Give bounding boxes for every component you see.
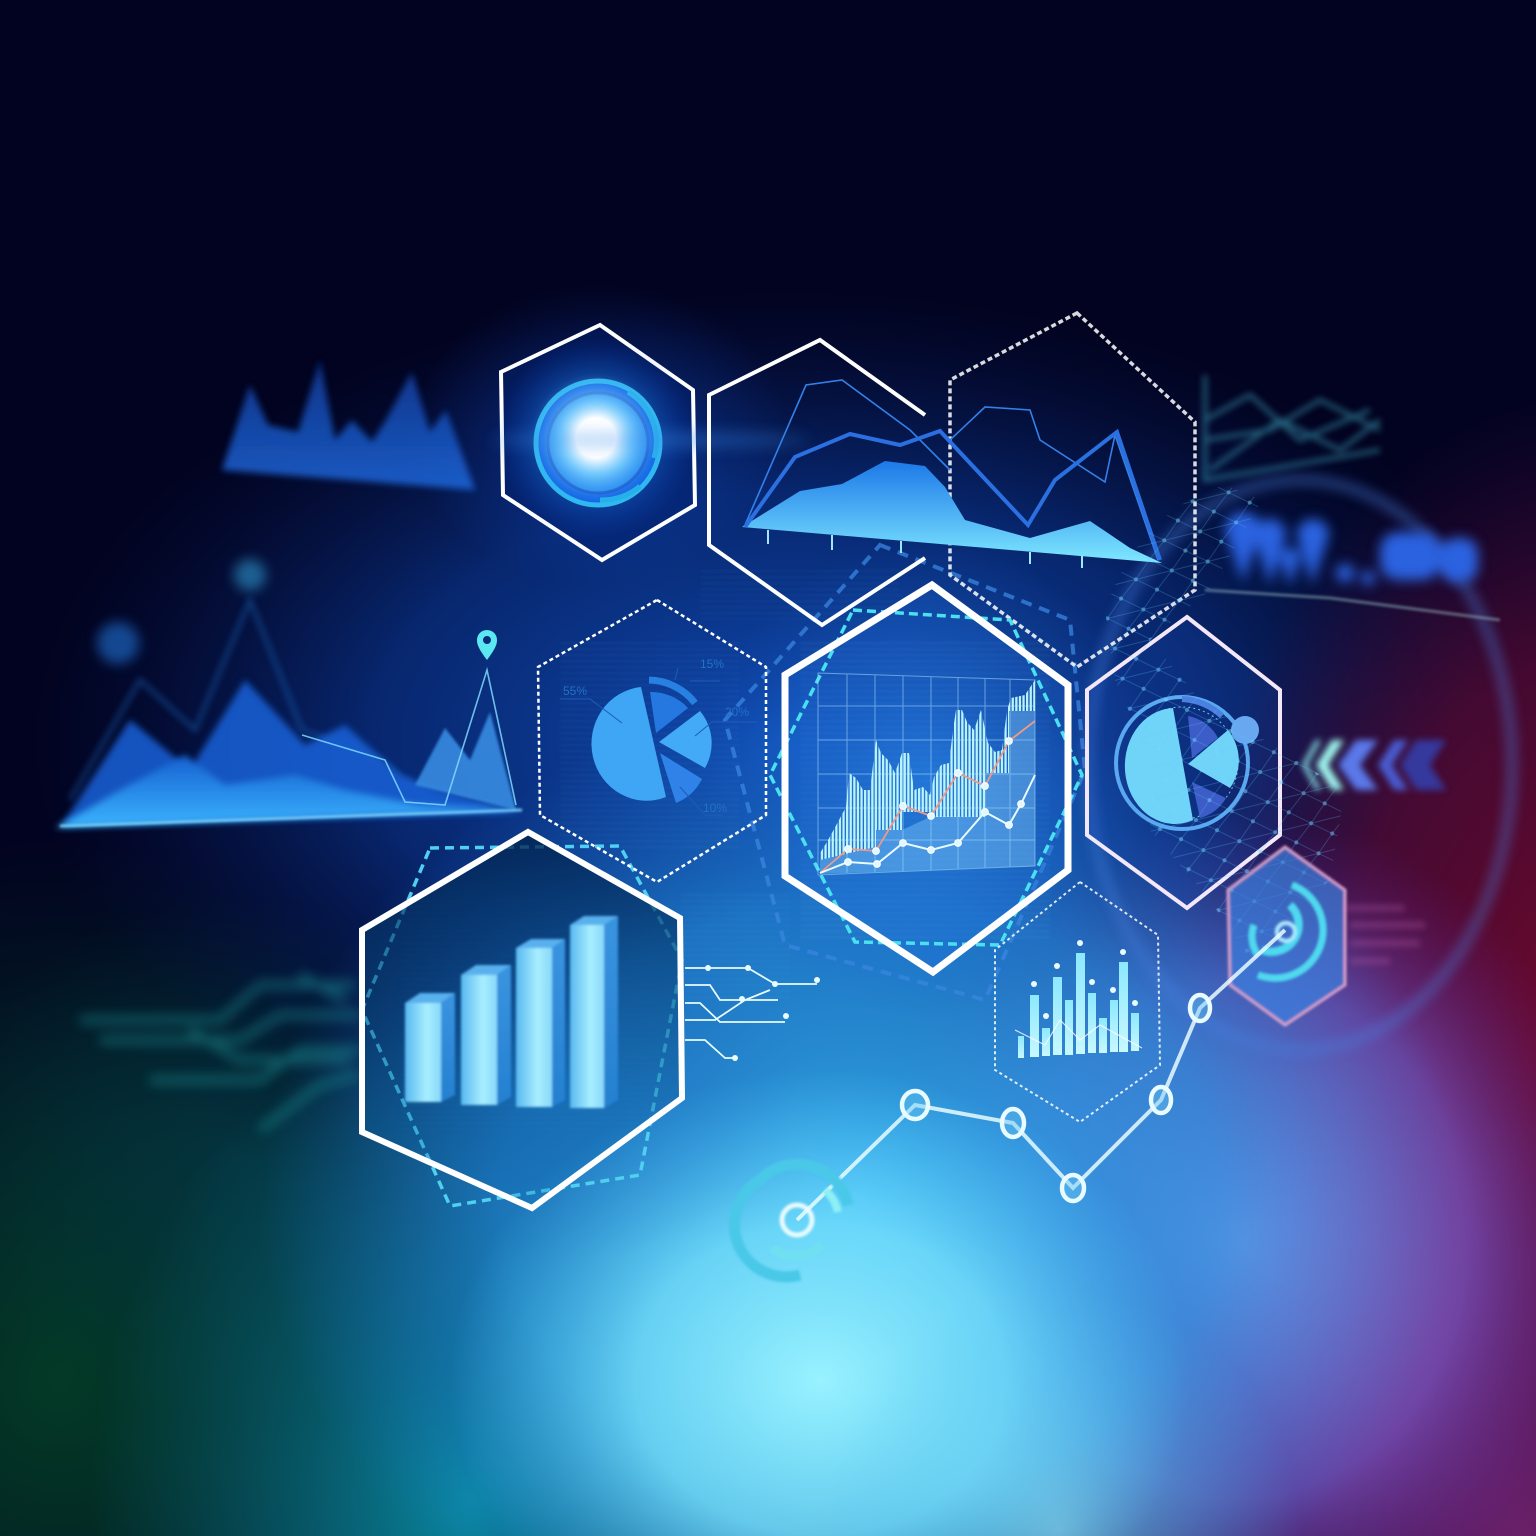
dashed outer hexagon around center bbox=[725, 545, 1085, 1000]
circuit traces, right sharp bbox=[685, 965, 820, 1061]
baseline ticks bbox=[768, 530, 1082, 568]
scan line panels bbox=[400, 570, 1050, 1130]
pie slice large bbox=[591, 687, 666, 801]
radial arcs bbox=[1258, 885, 1323, 978]
pie slice top bbox=[650, 692, 688, 733]
thin line with peak bbox=[302, 670, 516, 805]
pie labels bbox=[563, 657, 749, 815]
hexagon: area and line chart bbox=[709, 313, 1195, 667]
stripe bars bbox=[820, 680, 1035, 860]
bars bbox=[1018, 953, 1139, 1058]
ring segments bbox=[600, 392, 656, 500]
front peak areas bbox=[415, 712, 516, 810]
lower arc bbox=[772, 1245, 822, 1256]
dotted hexagon bbox=[950, 313, 1195, 667]
radial target icon at line start bbox=[734, 1164, 848, 1277]
top right blurred line chart bbox=[1205, 375, 1380, 480]
gauge large slice bbox=[1125, 708, 1193, 824]
overlay line bbox=[1015, 1020, 1142, 1048]
baseline bbox=[60, 810, 522, 826]
cyan dashed hexagon bbox=[770, 610, 1082, 945]
horizontal flare streak bbox=[490, 434, 810, 446]
left area chart bbox=[55, 559, 522, 828]
sharp map pin bbox=[477, 630, 497, 660]
thin upper lines bbox=[745, 380, 1158, 560]
area fill bbox=[742, 461, 1162, 563]
gauge disc bbox=[536, 381, 660, 505]
hub ring bbox=[1277, 923, 1295, 941]
blurred stripes on right bbox=[1345, 905, 1425, 964]
blurred horizontal axis on right bbox=[1205, 590, 1500, 620]
thick line bbox=[745, 431, 1160, 560]
dotted inner ring bbox=[1126, 707, 1238, 819]
globe ring bbox=[1088, 480, 1512, 1050]
leader lines bbox=[560, 668, 757, 815]
hexagon: gauge pie bbox=[1087, 617, 1280, 908]
inner ring bbox=[548, 393, 648, 493]
pie slice right bbox=[659, 711, 712, 768]
bar 1 bbox=[405, 993, 455, 1102]
top left blurred area chart bbox=[222, 360, 475, 490]
bar 4 bbox=[570, 916, 618, 1108]
blurred chevrons bbox=[1302, 740, 1446, 790]
light base of the area chart bbox=[55, 755, 522, 828]
chart grid bbox=[818, 673, 1035, 875]
gauge top slice bbox=[1188, 716, 1218, 758]
circuit traces, left blurred bbox=[80, 975, 360, 1130]
light lower area bbox=[820, 711, 1035, 874]
pie labels: 20% bbox=[725, 705, 749, 719]
blurred map pins bbox=[97, 559, 266, 664]
left arc bbox=[1252, 925, 1258, 955]
bar 3 bbox=[516, 939, 565, 1107]
blurred rear outlines bbox=[70, 600, 430, 800]
circuit nodes bbox=[705, 965, 820, 1061]
pins bbox=[1031, 940, 1138, 1019]
hexagon: 3d bar chart bbox=[362, 832, 682, 1208]
rising line with circle nodes bbox=[797, 930, 1285, 1220]
bar 2 bbox=[461, 965, 511, 1105]
pie labels: 15% bbox=[700, 657, 724, 671]
inner arc bbox=[1262, 905, 1299, 952]
white trend line bbox=[820, 775, 1035, 873]
hexagon: glowing radial gauge bbox=[490, 325, 810, 560]
white hexagon outline bbox=[785, 585, 1068, 972]
blue mountain areas bbox=[62, 680, 520, 825]
gauge right slice bbox=[1188, 730, 1239, 788]
central flare bbox=[496, 338, 696, 538]
globe mesh network bbox=[1106, 487, 1342, 953]
gauge ring bbox=[1116, 697, 1248, 829]
gauge bubble bbox=[1231, 716, 1259, 744]
red trend line bbox=[820, 721, 1035, 873]
hexagon: blurred radial icon bbox=[1228, 847, 1345, 1025]
outer arc bbox=[649, 680, 695, 703]
pie slice bottom bbox=[660, 753, 702, 803]
blurred pin row bbox=[1225, 512, 1478, 586]
outer arc bbox=[734, 1164, 848, 1277]
hexagon: small bar chart bbox=[995, 882, 1160, 1122]
inner arc bbox=[825, 1190, 838, 1212]
gauge outer arc bbox=[1182, 699, 1222, 716]
hexagon: pie chart bbox=[538, 600, 766, 882]
nodes bbox=[902, 995, 1210, 1201]
pie labels: 10% bbox=[703, 801, 727, 815]
cyan dashed hexagon behind bars bbox=[362, 846, 682, 1206]
gauge lower slice bbox=[1192, 782, 1226, 818]
pie labels: 55% bbox=[563, 684, 587, 698]
hexagon: main chart bbox=[770, 585, 1082, 972]
data points bbox=[845, 738, 1024, 867]
